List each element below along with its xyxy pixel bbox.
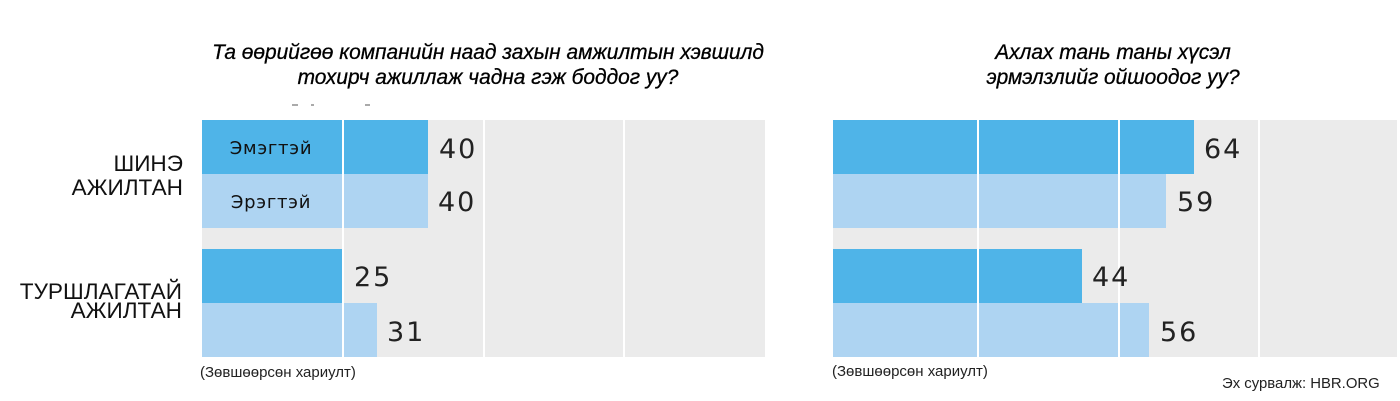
bar: experienced employee, male 31 — [202, 303, 377, 357]
heading: left question: тохирч ажиллаж чадна гэж боддог уу? — [298, 66, 678, 88]
bar: experienced employee, female 44 — [833, 249, 1082, 303]
row label: experienced employee: АЖИЛТАН — [71, 298, 182, 323]
value: 25: 25 — [354, 262, 392, 293]
bar: new employee, male 59 — [833, 174, 1166, 228]
axis note: (Зөвшөөрсөн хариулт) — [832, 363, 988, 380]
value: 31: 31 — [387, 317, 425, 348]
bar: experienced employee, male 56 — [833, 303, 1149, 357]
chart background — [833, 120, 1397, 357]
chart background — [202, 120, 765, 357]
legend label: female: Эмэгтэй — [230, 138, 312, 159]
panel: right bar chart — [832, 120, 1397, 380]
value: 59: 59 — [1177, 187, 1215, 218]
value: 44: 44 — [1092, 262, 1130, 293]
row label: new employee: АЖИЛТАН — [72, 174, 183, 200]
heading: right question: Ахлах тань таны хүсэл — [995, 40, 1231, 64]
row label: new employee — [72, 150, 183, 200]
row label: experienced employee: ТУРШЛАГАТАЙ — [20, 279, 182, 304]
heading: left question — [212, 40, 764, 89]
heading: left question: Та өөрийгөө компанийн наад захын амжилтын хэвшилд — [212, 40, 764, 64]
bar: new employee, female 64 — [833, 120, 1194, 174]
heading: right question: эрмэлзлийг ойшоодог уу? — [986, 66, 1240, 88]
source note: Эх сурвалж: HBR.ORG — [1222, 376, 1380, 392]
value: 40: 40 — [439, 134, 477, 165]
value: 40: 40 — [438, 187, 476, 218]
bar: experienced employee, female 25 — [202, 249, 342, 303]
value: 64: 64 — [1204, 134, 1242, 165]
bar: new employee, female 40 — [202, 120, 428, 174]
bar: new employee, male 40 — [202, 174, 428, 228]
value: 56: 56 — [1160, 317, 1198, 348]
row label: new employee: ШИНЭ — [113, 150, 183, 176]
axis note: (Зөвшөөрсөн хариулт) — [200, 364, 356, 381]
legend label: male: Эрэгтэй — [231, 192, 311, 213]
heading: right question — [986, 40, 1240, 89]
panel: left bar chart — [200, 120, 765, 381]
row label: experienced employee — [20, 278, 182, 323]
